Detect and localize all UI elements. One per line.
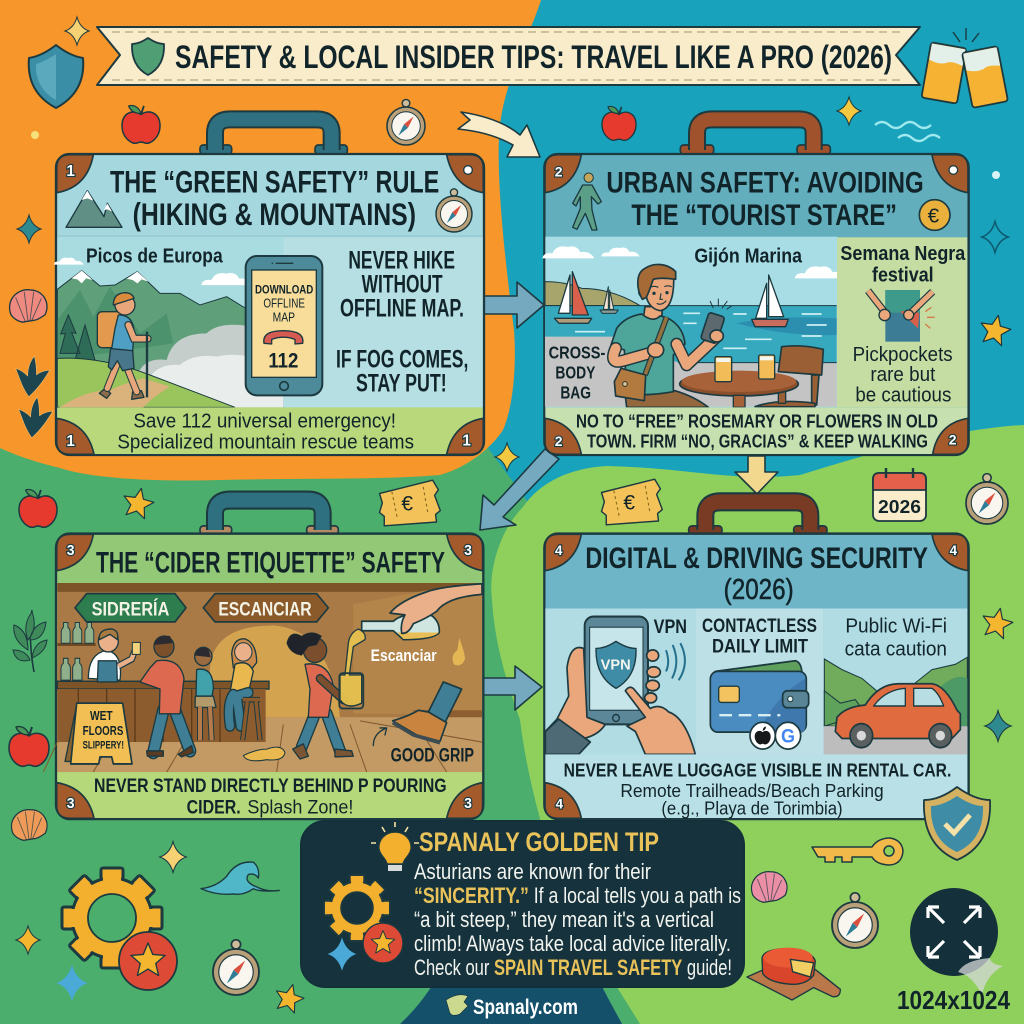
suitcase corners: [57, 534, 483, 818]
footer strip: NEVER STAND DIRECTLY BEHIND P POURING: [94, 776, 447, 797]
suitcase corners: [545, 534, 968, 818]
panel: card 4 digital and driving: VPN: [654, 616, 687, 637]
icon: cider glasses: [921, 28, 1008, 108]
heading: THE “CIDER ETIQUETTE” SAFETY: [96, 547, 445, 580]
safety advice text: STAY PUT!: [356, 371, 447, 398]
footer strip: Specialized mountain rescue teams: [117, 430, 414, 453]
corner numbers: 4: [556, 796, 563, 812]
tip body text: Asturians are known for their: [414, 859, 651, 884]
illustration: VPN phone: VPN: [601, 657, 631, 674]
customers at bar: [140, 636, 260, 757]
SIDRERIA sign: SIDRERÍA: [92, 598, 169, 621]
footer strip: Remote Trailheads/Beach Parking: [620, 780, 884, 801]
heading: (2026): [724, 573, 794, 605]
icon: blue shield: [29, 45, 83, 108]
phone in hand: [700, 312, 725, 344]
suitcase handle: [680, 119, 830, 154]
corner numbers: [555, 164, 958, 449]
label: cross-body bag: BAG: [560, 382, 591, 402]
illustration: wallet and card: G: [781, 725, 795, 747]
label: Picos de Europa: Picos de Europa: [86, 244, 223, 267]
safety advice text: [336, 247, 468, 398]
panel: card 3 cider etiquette: [43, 500, 483, 819]
illustration: rental car: [824, 608, 967, 755]
wet floors sign: SLIPPERY!: [83, 740, 124, 751]
icon: expand badge: [910, 888, 1003, 995]
illustration: Gijon marina scene: [542, 237, 847, 407]
panel: card 4 digital and driving: CONTACTLESS: [702, 614, 817, 636]
heading: DIGITAL & DRIVING SECURITY: [585, 543, 928, 575]
icon: plant sprig: [13, 610, 47, 672]
right text panel: [283, 237, 483, 407]
arrow: card 2 to card 3: [480, 449, 559, 530]
tip body text: climb! Always take local advice literally.: [414, 931, 731, 956]
panel: card 4 digital and driving: [544, 502, 969, 819]
decorative icons left column: [10, 99, 425, 438]
boats: [558, 275, 570, 313]
icon: cheese on board: [747, 948, 840, 1000]
shelves with bottles: [57, 622, 269, 689]
icon: large gear with star badge: [62, 868, 177, 990]
illustration: sidreria interior: [43, 583, 482, 772]
arrow: card 1 to card 2: [484, 282, 544, 328]
pouring bottle and hand: [339, 584, 482, 708]
heading: THE “TOURIST STARE”: [631, 199, 897, 232]
wet floors sign: WET: [90, 709, 113, 723]
icon: pink shell: [752, 872, 787, 902]
corner numbers: 2: [555, 433, 563, 449]
icon: wave: [201, 862, 279, 894]
tip body text: [414, 859, 741, 980]
corner numbers: [66, 163, 472, 450]
suitcase handle: [689, 502, 827, 534]
corner numbers: 2: [949, 432, 957, 448]
suitcase corners: [57, 155, 483, 454]
illustration: sidreria interior: Escanciar: [371, 646, 437, 665]
panel: Semana Negra: festival: [872, 265, 934, 287]
decorative icons right column: [602, 97, 1013, 347]
panel: Semana Negra: be cautious: [855, 384, 951, 407]
illustration: sidreria interior: GOOD GRIP: [391, 744, 474, 766]
woman with glass: [287, 633, 353, 759]
panel: Semana Negra: Semana Negra: [840, 243, 966, 265]
footer strip: [57, 772, 482, 819]
SIDRERIA sign: [75, 594, 186, 622]
illustration: VPN phone: [545, 608, 696, 755]
panel: Spanaly golden tip: [301, 821, 744, 987]
icon: pickpocket hands: [868, 290, 935, 342]
suitcase handle: [200, 119, 347, 154]
title banner: [97, 27, 920, 85]
label: cross-body bag: CROSS-: [549, 342, 606, 362]
icon: calendar 2026: 2026: [878, 497, 921, 517]
icon: mountain: [66, 191, 122, 227]
panel: Semana Negra: rare but: [870, 363, 936, 386]
arrow: curved to card 2: [458, 112, 540, 157]
bartender: [88, 629, 140, 682]
panel: card 4 digital and driving: Public Wi-Fi: [845, 615, 947, 638]
suitcase corners: [545, 155, 968, 454]
spill: [243, 747, 285, 761]
size label: 1024x1024: [897, 985, 1010, 1015]
chair and table: [778, 346, 823, 405]
panel: Semana Negra: Pickpockets: [853, 343, 953, 366]
phone with offline map: 112: [268, 349, 298, 373]
corner numbers: 4: [555, 542, 563, 558]
illustration: hiker in mountains: [54, 237, 283, 407]
icon: calendar 2026: [873, 468, 926, 521]
corner numbers: 1: [66, 163, 75, 180]
phone with offline map: DOWNLOAD: [255, 282, 314, 296]
ESCANCIAR sign: [203, 594, 328, 622]
corner numbers: [555, 542, 957, 812]
wet floors sign: [65, 703, 132, 764]
footer strip: NEVER LEAVE LUGGAGE VISIBLE IN RENTAL CAR.: [564, 760, 951, 781]
tip body text: Check our SPAIN TRAVEL SAFETY guide!: [414, 955, 732, 980]
icon: walking person: [573, 173, 601, 230]
heading: [606, 167, 924, 232]
website footer: Spanaly.com: [473, 996, 578, 1019]
icon: compass lower right: [832, 893, 878, 948]
decorative icons middle row: [19, 443, 1015, 741]
icon: lightbulb: [371, 822, 419, 871]
website footer: [446, 995, 578, 1019]
heading: URBAN SAFETY: AVOIDING: [606, 167, 924, 200]
arrow: card 2 to card 4: [735, 456, 778, 494]
footer strip: Save 112 universal emergency!: [133, 410, 396, 433]
corner numbers: 3: [67, 795, 75, 812]
bar counter: [57, 689, 266, 742]
panel: Semana Negra: [837, 237, 967, 407]
hands holding phone: [545, 647, 605, 754]
label: cross-body bag: [549, 342, 606, 402]
safety advice text: OFFLINE MAP.: [340, 296, 464, 323]
panel: card 1 green safety rule: [54, 119, 484, 455]
ESCANCIAR sign: ESCANCIAR: [218, 599, 312, 621]
footer strip: [545, 754, 967, 819]
wet floors sign: FLOORS: [83, 724, 123, 738]
safety advice text: WITHOUT: [362, 272, 443, 299]
corner numbers: [67, 542, 472, 812]
tip body text: “SINCERITY.” If a local tells you a path is: [414, 883, 741, 908]
panel: card 2 urban safety: [542, 119, 969, 455]
footer strip: TOWN. FIRM “NO, GRACIAS” & KEEP WALKING: [587, 431, 928, 452]
icon: sparkle top left: [65, 17, 89, 45]
safety advice text: NEVER HIKE: [348, 247, 455, 274]
heading: [585, 543, 928, 605]
corner numbers: 1: [462, 432, 471, 449]
footer strip: NO TO “FREE” ROSEMARY OR FLOWERS IN OLD: [576, 411, 938, 432]
tourist: [625, 391, 708, 407]
label: cross-body bag: BODY: [555, 362, 596, 382]
corner numbers: 3: [464, 542, 472, 559]
heading: (HIKING & MOUNTAINS): [133, 197, 416, 232]
boot with good grip: [373, 682, 462, 746]
panel: card 4 digital and driving: cata caution: [845, 638, 947, 661]
tip body text: “a bit steep,” they mean it's a vertical: [414, 907, 714, 932]
icon: banner shield: [132, 38, 164, 75]
icon: euro coin: €: [928, 205, 940, 228]
suitcase handle: [200, 500, 338, 534]
heading: SPANALY GOLDEN TIP: [419, 827, 659, 857]
phone with offline map: [246, 256, 322, 395]
footer strip: [57, 407, 483, 454]
corner numbers: 3: [464, 795, 472, 812]
icon: shield with check: [924, 787, 990, 860]
footer strip: [545, 407, 967, 454]
corner numbers: 2: [555, 164, 563, 180]
icon: key: [812, 838, 903, 865]
illustration: wallet and card: [696, 608, 824, 755]
corner numbers: 4: [950, 542, 957, 558]
icon: small compass: [436, 189, 472, 232]
icon: euro coin: [919, 200, 950, 230]
label: Gijon Marina: Gijón Marina: [694, 246, 803, 268]
heading: THE “GREEN SAFETY” RULE: [110, 165, 439, 200]
phone with offline map: MAP: [273, 311, 295, 325]
arrow: card 3 to card 4: [473, 666, 542, 710]
footer strip: Splash Zone!: [247, 797, 353, 819]
panel: card 4 digital and driving: DAILY LIMIT: [712, 635, 809, 657]
footer strip: (e.g., Playa de Torimbia): [661, 798, 843, 819]
safety advice text: IF FOG COMES,: [336, 347, 468, 374]
heading: [110, 165, 439, 232]
icons lower left: [9, 727, 307, 1014]
corner numbers: 3: [67, 542, 75, 559]
phone with offline map: OFFLINE: [263, 297, 305, 311]
corner numbers: 1: [66, 433, 75, 450]
icon: gear with star badge: [324, 875, 403, 971]
footer strip: CIDER.: [187, 797, 241, 819]
